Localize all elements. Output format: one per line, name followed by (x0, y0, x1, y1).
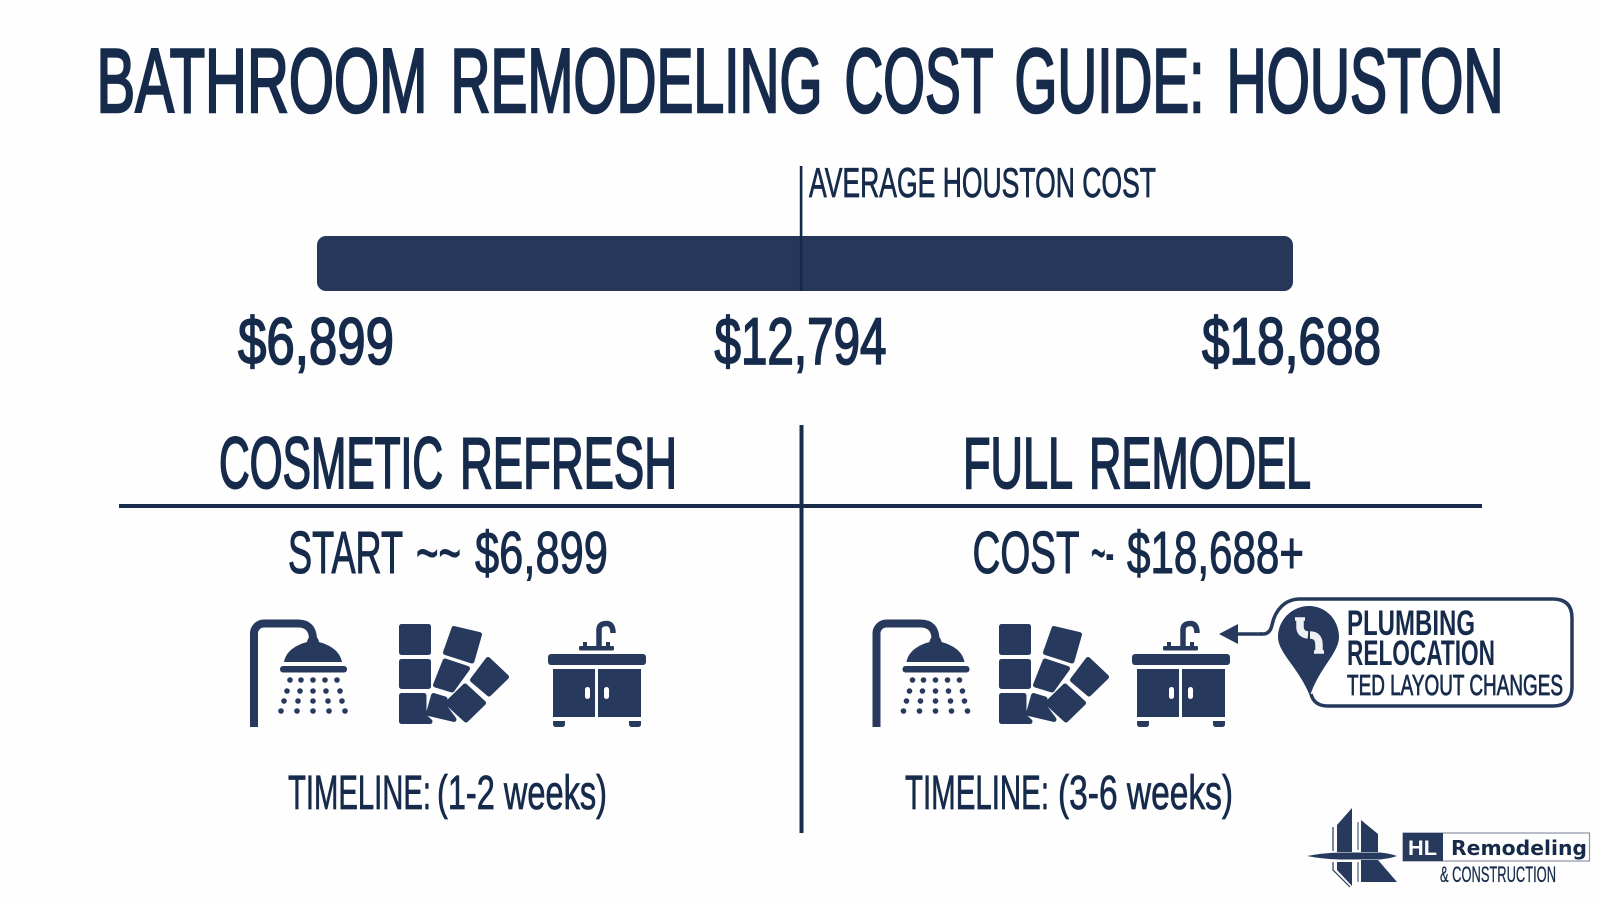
timeline: TIMELINE: (905, 767, 1049, 820)
total cost: $18,688+ (1127, 520, 1304, 586)
icon: vanity (548, 624, 646, 727)
callout text: plumbing: PLUMBING (1347, 604, 1475, 643)
icon: tile samples (402, 626, 506, 722)
logo badge (1403, 833, 1590, 861)
icon: shower (254, 623, 348, 727)
starting cost: START (288, 520, 403, 586)
panel: full remodel (876, 424, 1311, 820)
logo: HL Remodeling and Construction (1307, 808, 1590, 887)
value: high: $18,688 (1202, 304, 1381, 378)
callout: plumbing relocation (1260, 599, 1572, 706)
logo text: HL: HL (1408, 836, 1437, 860)
timeline: TIMELINE: (288, 767, 431, 820)
starting cost: $6,899 (475, 520, 608, 586)
value: low: $6,899 (238, 304, 394, 378)
logo text: Remodeling: Remodeling (1451, 836, 1587, 860)
label: average Houston cost: AVERAGE HOUSTON COST (809, 159, 1156, 206)
icon: location pin with pipe (1278, 606, 1339, 696)
title (96, 31, 1504, 132)
title: GUIDE: (1014, 31, 1204, 132)
title: COST (844, 31, 994, 132)
column dividers (119, 504, 1482, 508)
heading: cosmetic refresh: COSMETIC (219, 424, 443, 504)
range chart: cost bar with average marker and values (238, 159, 1381, 378)
heading: full remodel: FULL (963, 424, 1073, 504)
heading: cosmetic refresh: REFRESH (460, 424, 677, 504)
heading: full remodel (963, 424, 1311, 504)
icon: shower (876, 623, 970, 727)
icon: tile samples (1002, 626, 1106, 722)
average marker line (800, 166, 802, 291)
heading: full remodel: REMODEL (1089, 424, 1311, 504)
starting cost (288, 520, 608, 586)
total cost: COST (972, 520, 1080, 586)
timeline: (3-6 weeks) (1058, 767, 1233, 820)
value: average: $12,794 (714, 304, 886, 378)
total cost: ~- (1091, 520, 1114, 586)
icon: vanity (1132, 624, 1230, 727)
panel: cosmetic refresh (219, 424, 677, 820)
cost range bar (317, 236, 1293, 291)
logo mark (1307, 808, 1397, 887)
arrow: callout to vanity (1219, 624, 1262, 644)
starting cost: ~~ (416, 520, 461, 586)
timeline: (1-2 weeks) (437, 767, 607, 820)
callout text: relocation: RELOCATION (1347, 634, 1495, 673)
total cost (972, 520, 1304, 586)
title: BATHROOM (96, 31, 428, 132)
callout outline (1260, 599, 1572, 706)
title: REMODELING (450, 31, 822, 132)
